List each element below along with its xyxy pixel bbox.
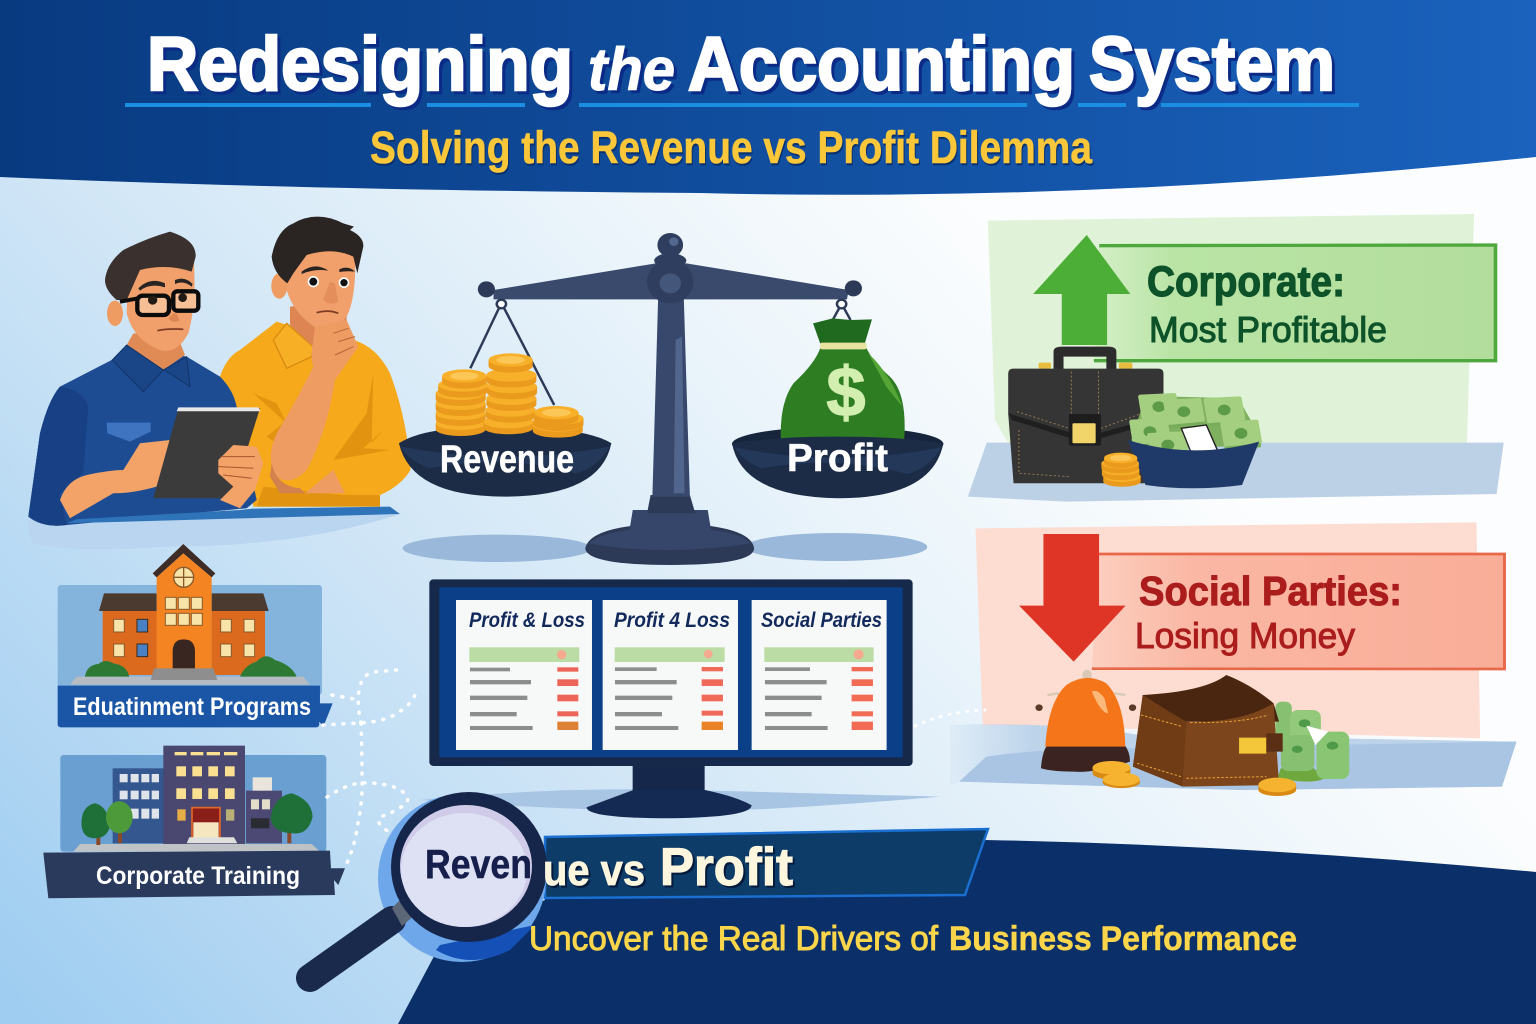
label box	[1092, 553, 1506, 670]
connector	[392, 895, 416, 926]
wallet cash	[1275, 702, 1349, 782]
monitor	[420, 579, 940, 818]
label: Losing Money: Losing Money	[1135, 615, 1355, 656]
label: Profit: Profit	[787, 437, 888, 480]
monitor stand	[587, 765, 752, 818]
lens highlight	[401, 813, 527, 927]
monitor screen	[439, 587, 903, 757]
header band	[0, 0, 1536, 195]
school backdrop	[58, 585, 322, 695]
man in blue shirt	[28, 232, 263, 526]
desk shadow	[28, 514, 400, 549]
coin stack	[1101, 453, 1141, 487]
floor	[950, 724, 1516, 790]
sub banner text: Profit: Profit	[660, 838, 793, 897]
floor shadow	[420, 789, 940, 812]
alarm bell	[1035, 670, 1136, 772]
scale beam	[470, 233, 862, 405]
label: Most Profitable: Most Profitable	[1149, 309, 1387, 350]
scale column	[652, 287, 690, 497]
label: Corporate: Corporate:	[1147, 258, 1345, 306]
money bowl	[1128, 395, 1261, 488]
handle	[310, 920, 392, 978]
sub banner text: ue vs: ue vs	[543, 846, 645, 895]
left pan	[399, 426, 611, 497]
gold coins	[1093, 761, 1296, 796]
panel: social parties losing	[950, 522, 1516, 796]
school building	[70, 544, 310, 685]
red backdrop	[975, 522, 1480, 738]
scale shadows	[402, 533, 927, 562]
lens glass	[400, 805, 532, 927]
program banner navy	[43, 851, 345, 898]
right pan front	[732, 437, 943, 498]
scale base	[585, 495, 754, 565]
man in yellow shirt	[220, 217, 411, 507]
label box border	[1092, 554, 1504, 669]
monitor frame	[429, 579, 913, 766]
sheet title: Social Parties: Social Parties	[761, 609, 882, 632]
office buildings	[73, 746, 320, 852]
title underline	[125, 103, 1359, 107]
panel: corporate profitable	[968, 214, 1504, 502]
rim	[391, 792, 547, 942]
briefcase	[1008, 347, 1163, 483]
title: the	[588, 36, 675, 103]
label box border	[1094, 245, 1496, 361]
tagline bold: Business Performance	[949, 920, 1297, 958]
magnified word: Reven	[425, 841, 532, 887]
money bag	[781, 318, 905, 442]
title	[147, 22, 1335, 107]
sheet 2	[603, 600, 738, 750]
dotted connector right	[915, 710, 985, 726]
dollar sign: $	[827, 353, 865, 431]
sub banner: Revenue vs Profit	[545, 829, 988, 898]
balance scale	[399, 233, 943, 565]
dotted connectors left	[323, 670, 417, 863]
sheet title: Profit 4 Loss: Profit 4 Loss	[614, 609, 730, 632]
office backdrop	[60, 755, 326, 852]
arrow down	[1019, 534, 1126, 662]
tagline regular: Uncover the Real Drivers of	[529, 920, 939, 958]
desk edge	[67, 507, 400, 523]
magnifier	[310, 792, 547, 978]
sheet 3	[752, 600, 887, 750]
panel: two accountants	[28, 217, 411, 549]
label box	[1094, 244, 1497, 362]
label: Eduatinment Programs: Eduatinment Programs	[73, 693, 311, 721]
label: Revenue: Revenue	[440, 438, 574, 481]
floor	[968, 443, 1504, 502]
arrow up	[1033, 235, 1130, 345]
title: System	[1089, 22, 1335, 107]
lens halo on navy	[436, 925, 535, 960]
title: Redesigning	[147, 22, 573, 107]
lens halo	[378, 794, 546, 962]
program banner blue	[58, 686, 333, 727]
wallet	[1133, 675, 1283, 787]
green backdrop	[988, 214, 1474, 443]
title: Accounting	[688, 22, 1075, 107]
panel: programs	[43, 544, 345, 898]
bottom navy band	[398, 840, 1536, 1024]
subtitle: Solving the Revenue vs Profit Dilemma	[370, 122, 1093, 173]
right pan back	[732, 427, 943, 461]
label: Corporate Training: Corporate Training	[96, 862, 300, 890]
sheet title: Profit & Loss: Profit & Loss	[469, 609, 585, 632]
coin stacks	[436, 353, 583, 438]
label: Social Parties: Social Parties:	[1139, 568, 1402, 614]
sheet 1	[456, 600, 592, 750]
